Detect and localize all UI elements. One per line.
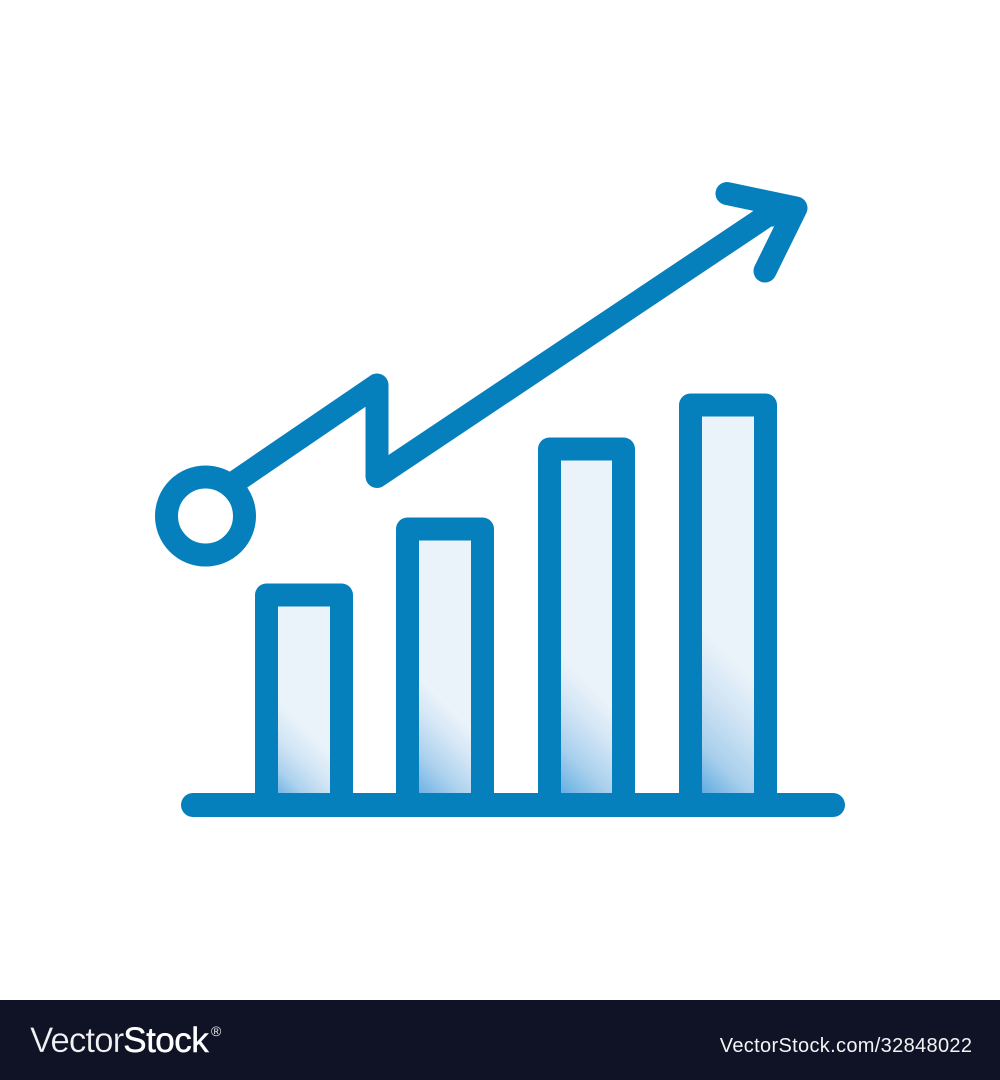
image URL: VectorStock.com/32848022 — [720, 1035, 972, 1057]
bar 1 — [266, 595, 342, 805]
VectorStock logo: VectorStock — [30, 1021, 208, 1060]
trend arrow — [232, 194, 796, 484]
bar 3 — [550, 449, 624, 805]
VectorStock logo: ® — [211, 1023, 221, 1039]
footer bar — [0, 1000, 1000, 1080]
baseline axis — [193, 793, 833, 817]
start circle marker — [166, 477, 244, 555]
bar 4 — [690, 405, 766, 805]
bar 2 — [408, 529, 482, 805]
